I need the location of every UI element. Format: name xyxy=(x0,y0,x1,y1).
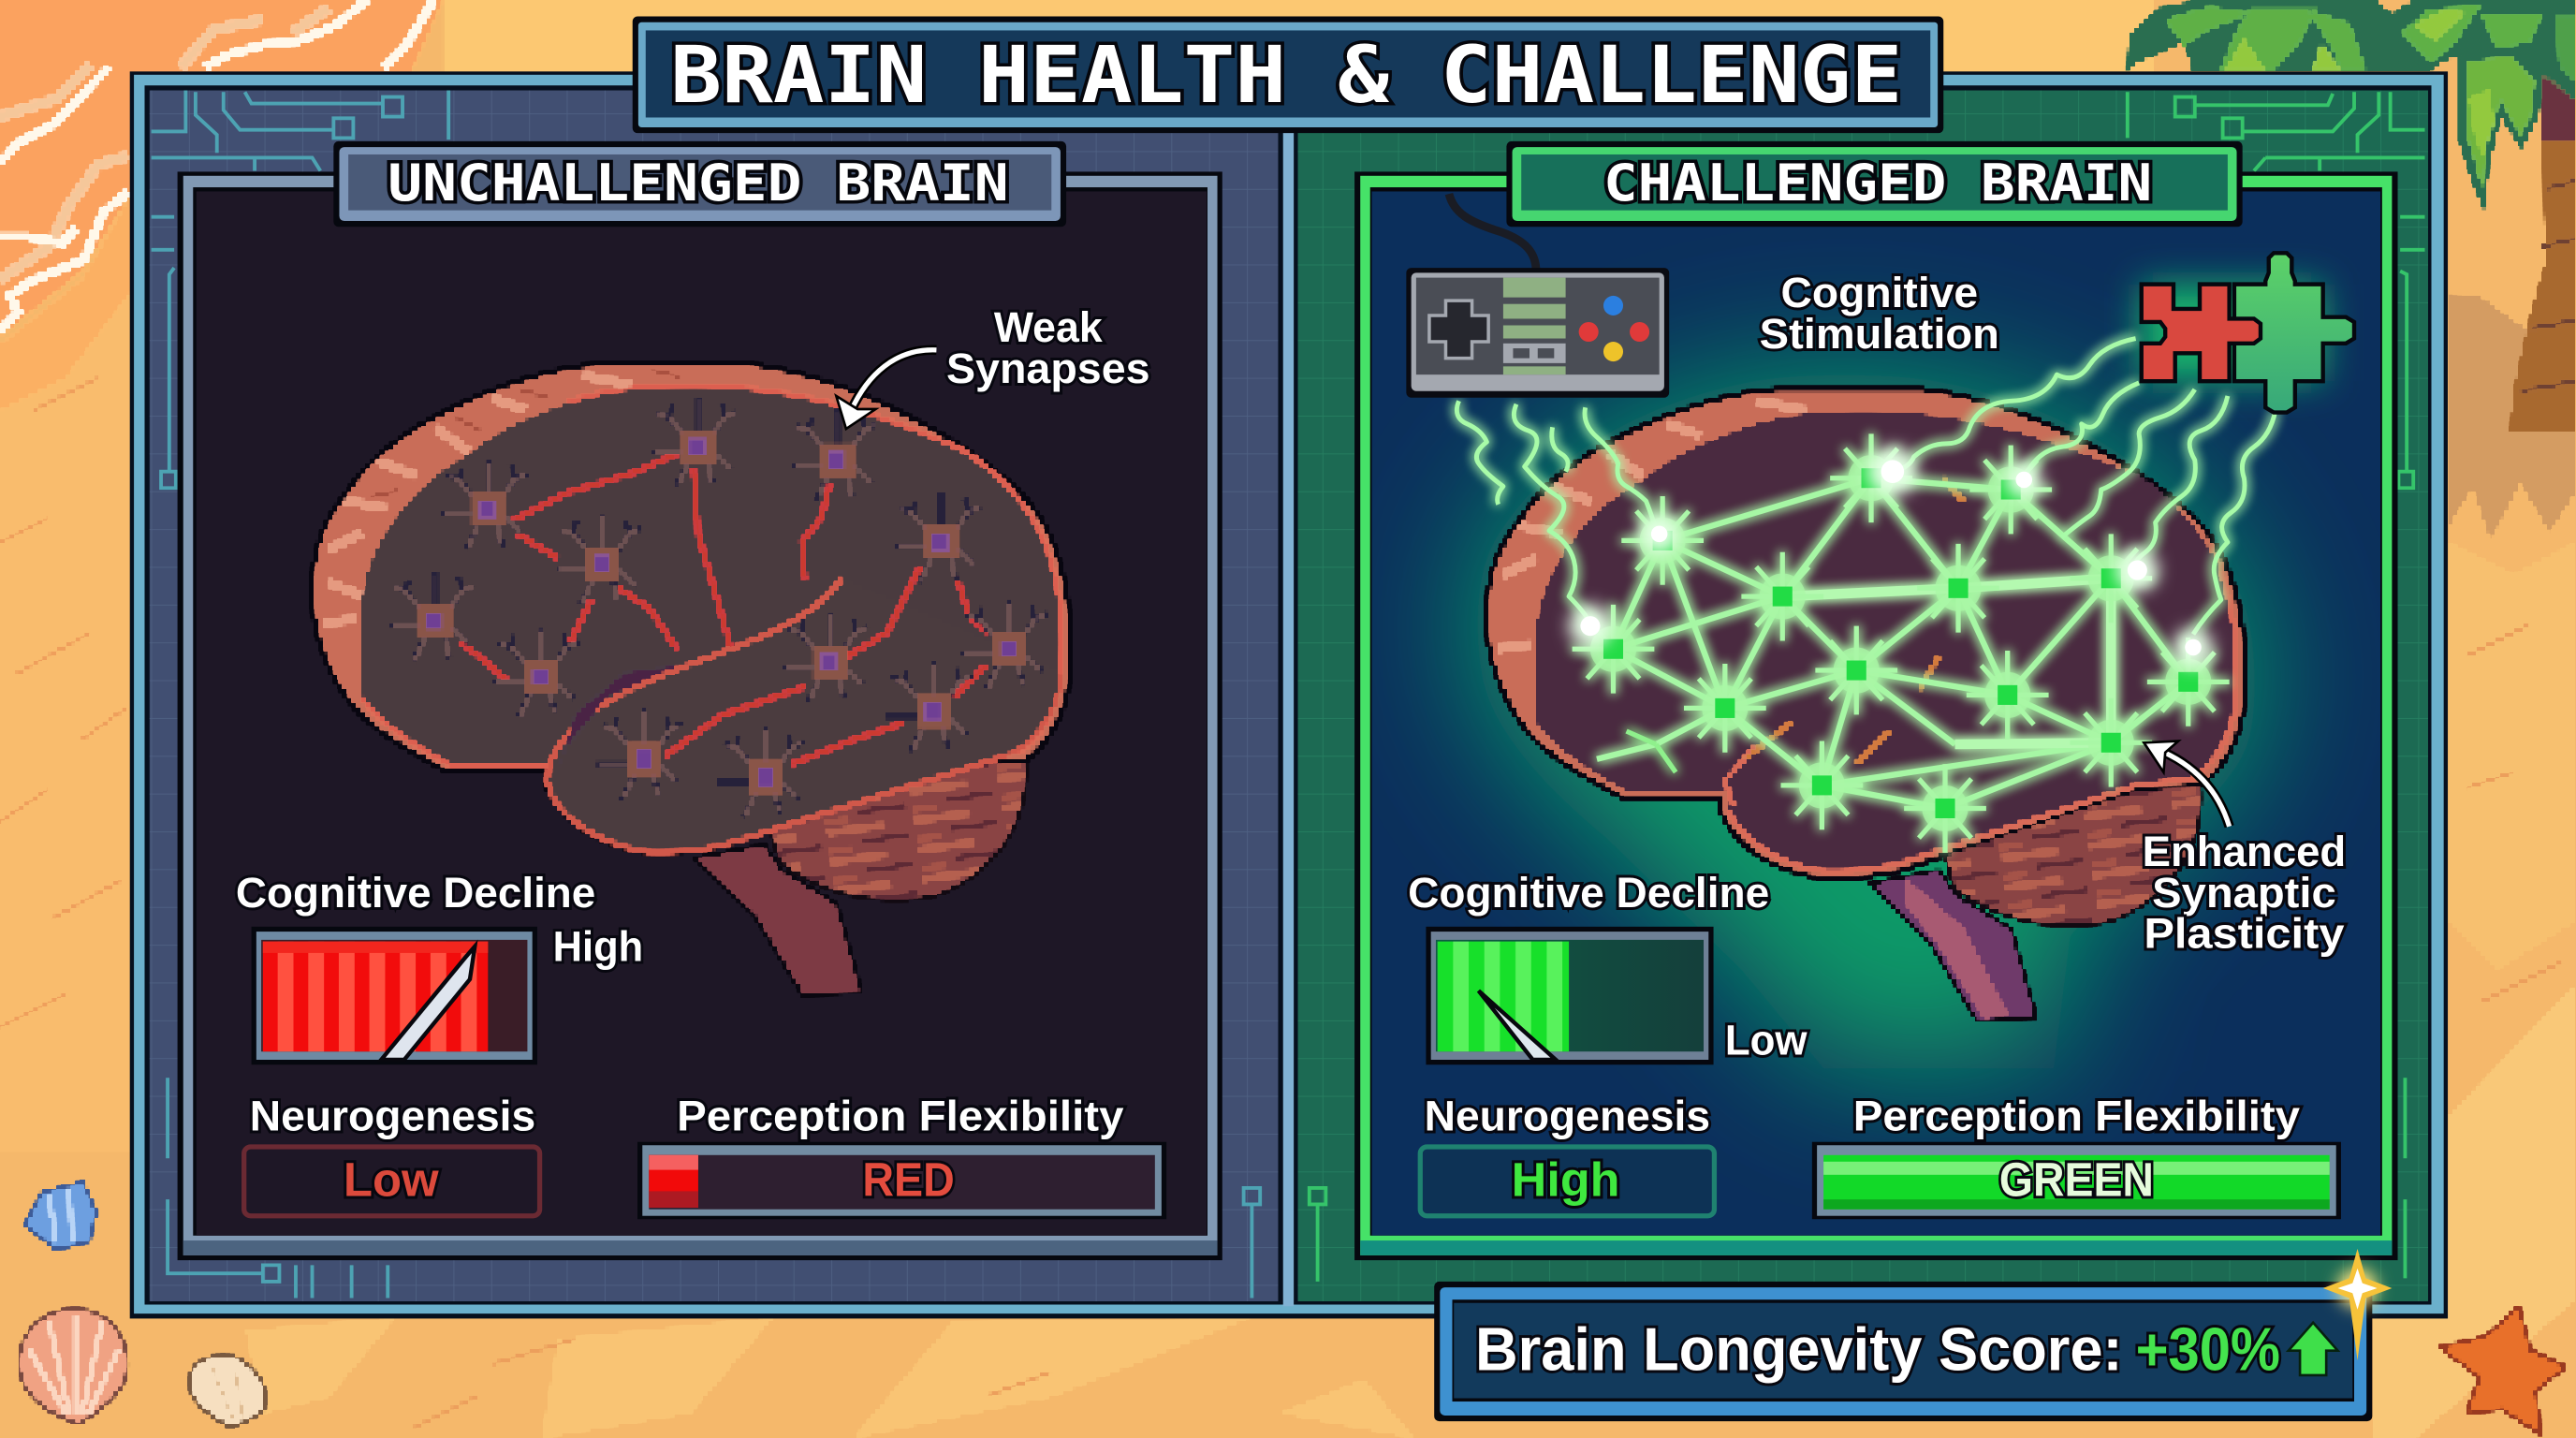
label: cognitive stimulation: Cognitive xyxy=(1781,269,1978,316)
icon: pink shell xyxy=(20,1310,126,1423)
heading: challenged brain xyxy=(1506,141,2243,227)
illustration: challenged brain xyxy=(1456,339,2276,1020)
gauge: cognitive decline high xyxy=(236,869,643,1064)
arrow xyxy=(2144,741,2230,827)
callout: enhanced synaptic plasticity: Enhanced xyxy=(2143,828,2346,875)
bright sparks xyxy=(1569,447,2213,668)
panel: outer console frame xyxy=(130,71,2448,1318)
temporal fold xyxy=(547,580,1061,853)
score panel: brain longevity xyxy=(1434,1282,2372,1421)
stat: neurogenesis low xyxy=(244,1092,540,1216)
stat: perception flexibility red xyxy=(637,1092,1166,1219)
palm tree xyxy=(2128,0,2576,431)
stat: neurogenesis low: Low xyxy=(344,1153,439,1207)
icon: up arrow xyxy=(2289,1323,2337,1375)
icon: blue shell xyxy=(26,1183,95,1249)
cortex face xyxy=(361,386,1061,846)
gauge: cognitive decline high: Cognitive Decline xyxy=(236,869,595,917)
illustration: unchallenged brain xyxy=(313,364,1070,995)
gauge: cognitive decline high: High xyxy=(553,923,643,971)
neurons xyxy=(388,396,1048,818)
stat: perception flexibility green xyxy=(1812,1092,2341,1219)
panel: unchallenged brain xyxy=(178,171,1222,1260)
heading: challenged brain: CHALLENGED BRAIN xyxy=(1603,154,2152,213)
synaptic network xyxy=(1573,433,2230,853)
score panel: brain longevity: +30% xyxy=(2136,1315,2280,1384)
stat: neurogenesis low: Neurogenesis xyxy=(250,1092,535,1139)
title text: BRAIN HEALTH & CHALLENGE xyxy=(670,29,1902,121)
stat: neurogenesis high xyxy=(1420,1092,1714,1216)
icon: puzzle pieces xyxy=(2142,253,2354,413)
brain base xyxy=(1486,389,2245,1020)
gauge: cognitive decline low: Cognitive Decline xyxy=(1408,869,1769,917)
arrow xyxy=(836,350,936,429)
label: cognitive stimulation xyxy=(1760,269,1999,358)
callout: weak synapses: Synapses xyxy=(946,345,1150,392)
title banner xyxy=(633,17,1943,133)
label: cognitive stimulation: Stimulation xyxy=(1760,310,1999,358)
heading: unchallenged brain: UNCHALLENGED BRAIN xyxy=(388,154,1009,213)
energy bolts xyxy=(1456,339,2276,634)
heading: unchallenged brain xyxy=(333,141,1066,227)
outer rim xyxy=(313,364,1070,853)
cerebellum xyxy=(768,760,1026,900)
callout: enhanced synaptic plasticity xyxy=(2143,741,2346,958)
gauge: cognitive decline low xyxy=(1408,869,1808,1064)
stat: perception flexibility red: RED xyxy=(862,1153,955,1207)
stat: neurogenesis high: High xyxy=(1512,1153,1620,1207)
stat: perception flexibility red: Perception Flexibility xyxy=(677,1092,1124,1139)
callout: weak synapses xyxy=(836,303,1150,429)
panel: challenged brain xyxy=(1354,171,2398,1260)
stat: perception flexibility green: Perception Flexibility xyxy=(1853,1092,2301,1139)
icon: starfish xyxy=(2441,1308,2565,1432)
stat: neurogenesis high: Neurogenesis xyxy=(1425,1092,1710,1139)
icon: cream shell xyxy=(190,1357,265,1426)
stat: perception flexibility green: GREEN xyxy=(1999,1153,2154,1207)
icon: game controller xyxy=(1406,194,1669,398)
icon: sparkle xyxy=(2323,1249,2392,1360)
score panel: brain longevity: Brain Longevity Score: xyxy=(1475,1315,2123,1384)
callout: enhanced synaptic plasticity: Synaptic xyxy=(2152,869,2336,917)
weak synapses xyxy=(460,452,994,764)
brain stem xyxy=(696,845,861,995)
gauge: cognitive decline low: Low xyxy=(1725,1017,1808,1064)
callout: weak synapses: Weak xyxy=(994,303,1103,351)
callout: enhanced synaptic plasticity: Plasticity xyxy=(2144,910,2345,958)
